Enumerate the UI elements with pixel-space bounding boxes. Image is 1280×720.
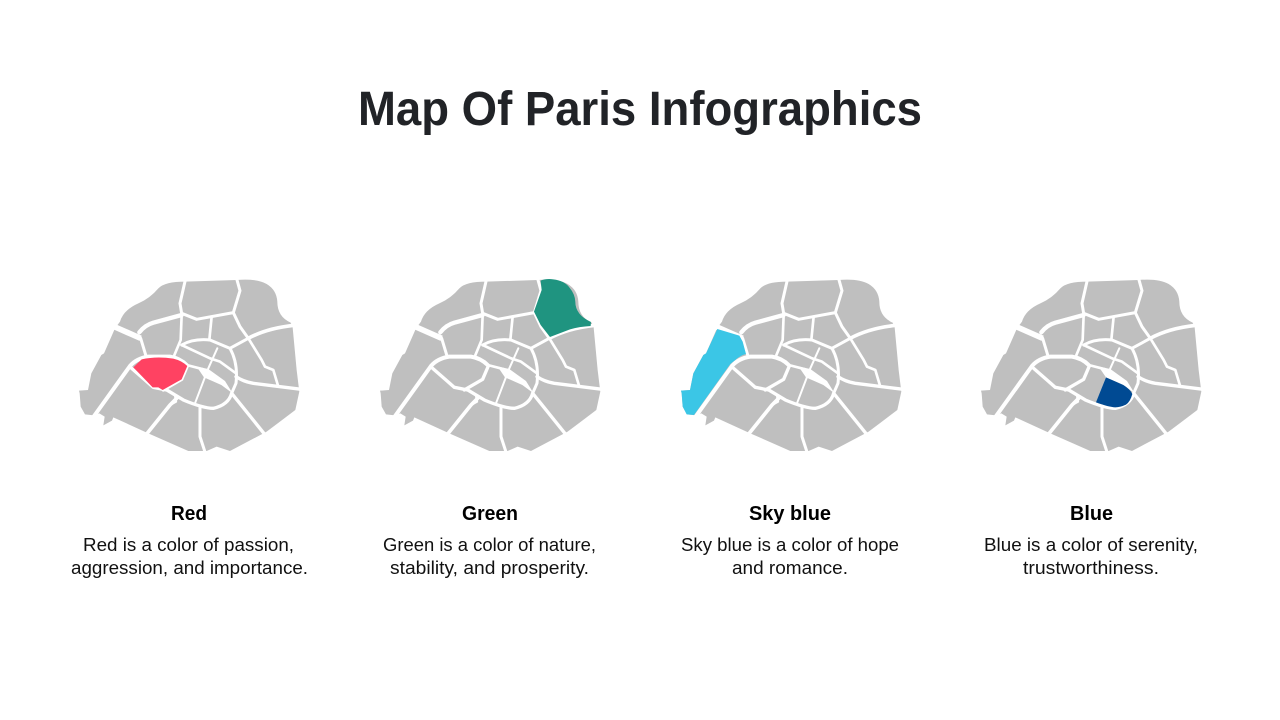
text: blue description [984,535,1198,578]
text: green description: Green is a color of nature, [383,535,596,555]
heading: sky blue: Sky blue [749,503,831,525]
panel: green [380,279,602,578]
map: blue highlight [981,279,1203,452]
heading: red: Red [171,503,207,525]
text: sky blue description: Sky blue is a color of hope [681,535,899,555]
text: green description: stability, and prosperity. [390,558,589,578]
text: sky blue description: and romance. [732,558,848,578]
text: red description: aggression, and importance. [71,558,308,578]
panel: blue [981,279,1203,578]
text: green description [383,535,596,578]
text: blue description: trustworthiness. [1023,558,1159,578]
map: green highlight [380,279,602,452]
text: sky blue description [681,535,899,578]
heading: green: Green [462,503,518,525]
heading: blue: Blue [1070,503,1113,525]
text: red description: Red is a color of passion, [83,535,294,555]
map: sky blue highlight [681,279,903,452]
text: blue description: Blue is a color of serenity, [984,535,1198,555]
title: Map Of Paris Infographics [358,83,922,136]
map: red highlight [79,279,301,452]
text: red description [71,535,308,578]
panel: sky blue [681,279,903,578]
panel: red [71,279,308,578]
